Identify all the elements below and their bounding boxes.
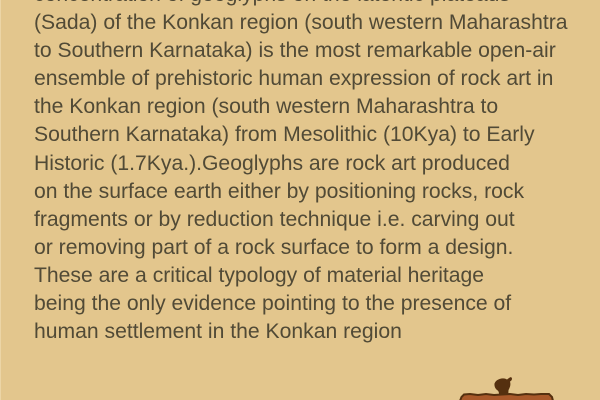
text block: geoglyph description: Southern Karnataka) from Mesolithic (10Kya) to Early: [34, 123, 535, 146]
text block: geoglyph description: to Southern Karnataka) is the most remarkable open-air: [34, 39, 556, 62]
text block: geoglyph description: Historic (1.7Kya.).Geoglyphs are rock art produced: [34, 152, 510, 175]
text block: geoglyph description: being the only evidence pointing to the presence of: [34, 292, 511, 315]
text block: geoglyph description: the Konkan region (south western Maharashtra to: [34, 95, 498, 118]
text block: geoglyph description: These are a critical typology of material heritage: [34, 264, 484, 287]
text block: geoglyph description: or removing part of a rock surface to form a design.: [34, 236, 513, 259]
text block: geoglyph description: on the surface earth either by positioning rocks, rock: [34, 180, 524, 203]
text block: geoglyph description: human settlement in the Konkan region: [34, 320, 402, 343]
text block: geoglyph description: (Sada) of the Konkan region (south western Maharashtra: [34, 11, 568, 34]
text block: geoglyph description: ensemble of prehistoric human expression of rock art in: [34, 67, 553, 90]
text block: geoglyph description: fragments or by reduction technique i.e. carving out: [34, 208, 515, 231]
